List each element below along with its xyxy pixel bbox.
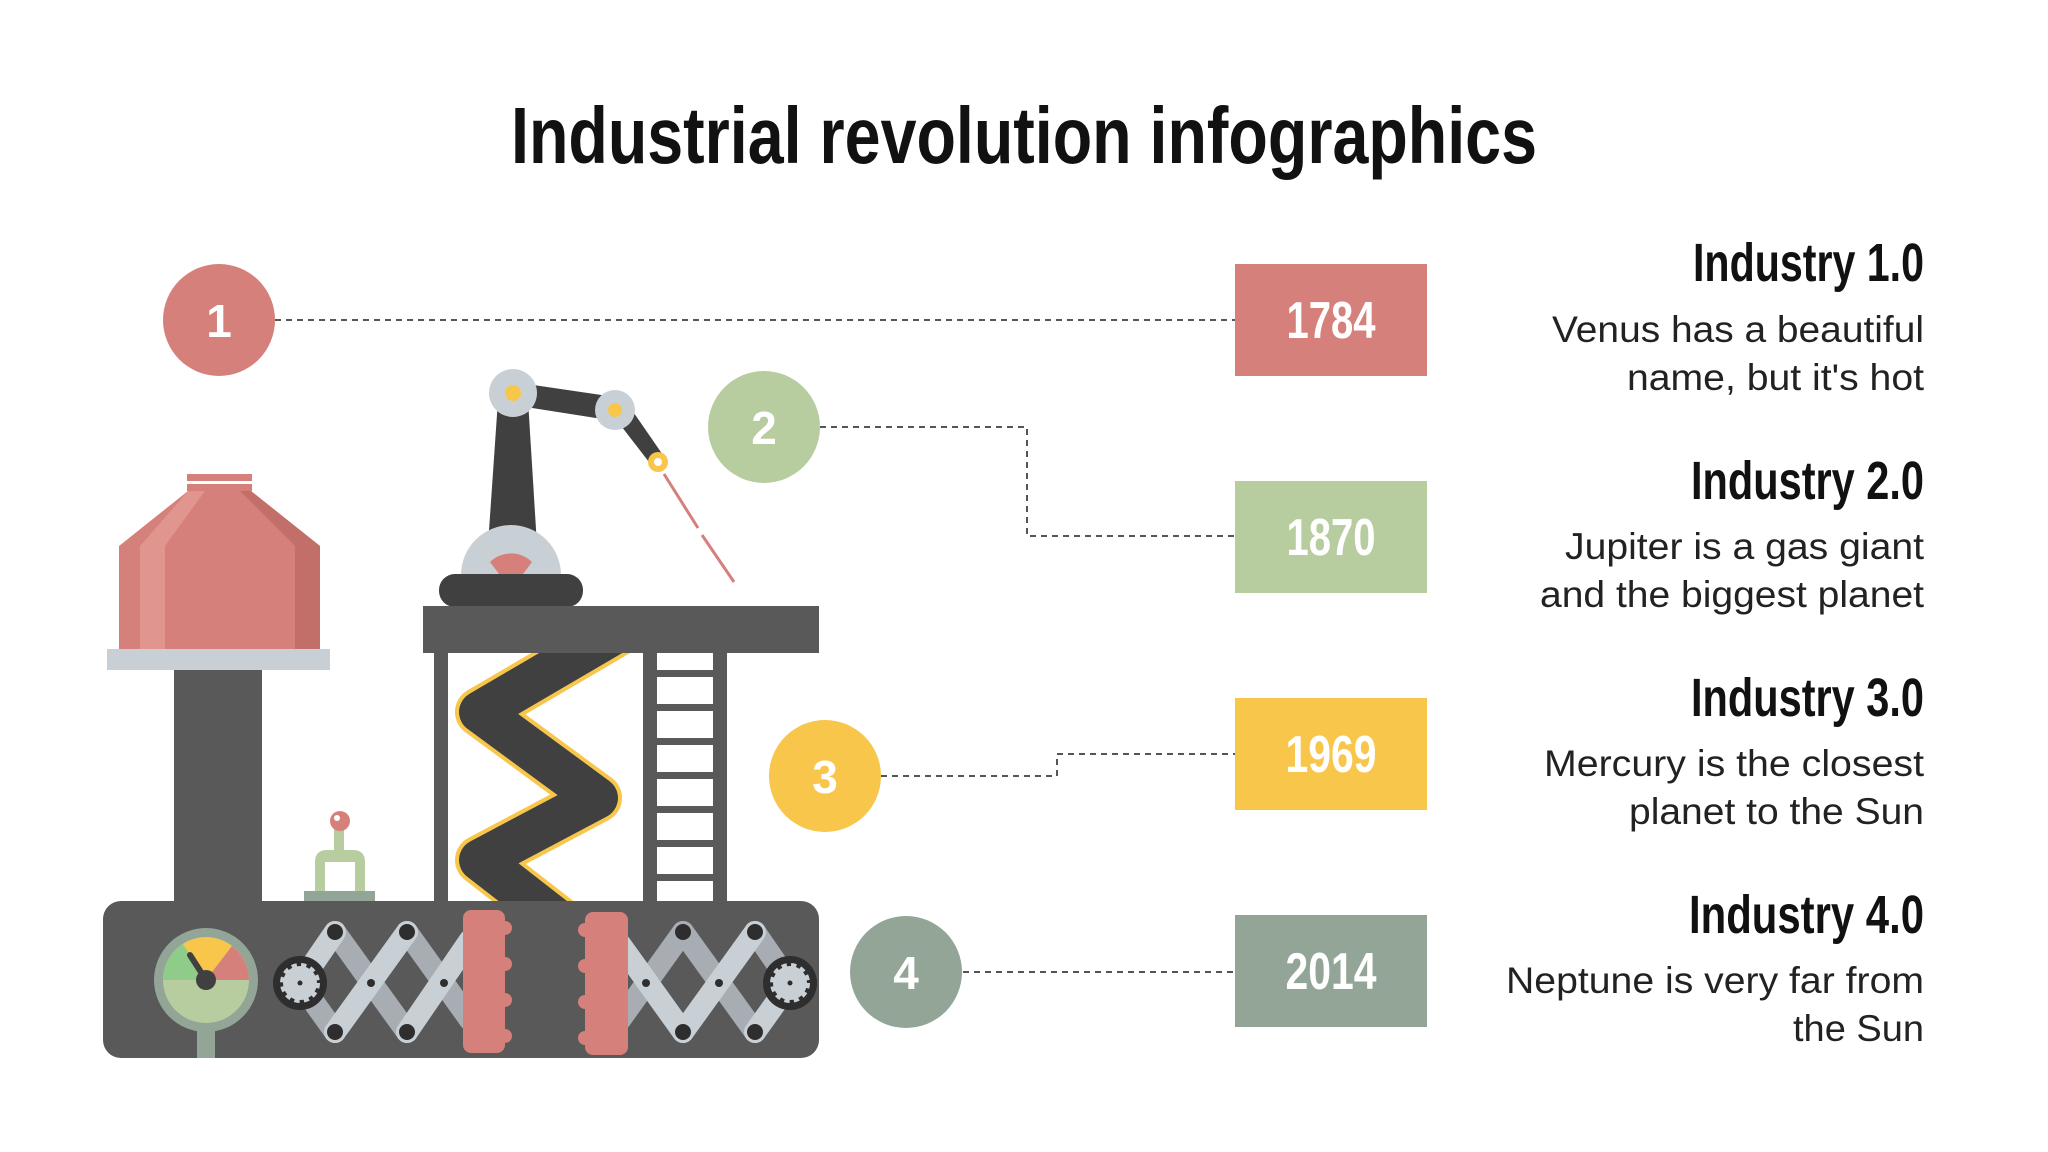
text block: Industry 3.0: Mercury is the closest bbox=[1544, 743, 1925, 784]
text block: Industry 4.0: the Sun bbox=[1793, 1008, 1924, 1049]
text block: Industry 1.0 bbox=[1552, 233, 1925, 398]
machine base bbox=[103, 901, 819, 1058]
year box 1784: 1784 bbox=[1286, 292, 1376, 350]
circle 4 bbox=[850, 916, 962, 1028]
year box 2014 bbox=[1235, 915, 1427, 1027]
text block: Industry 3.0: planet to the Sun bbox=[1629, 791, 1924, 832]
pressure gauge bbox=[154, 928, 258, 1058]
circle 2: 2 bbox=[751, 402, 777, 454]
circle 2 bbox=[708, 371, 820, 483]
text block: Industry 2.0: Industry 2.0 bbox=[1691, 451, 1924, 511]
year box 1870: 1870 bbox=[1286, 509, 1376, 567]
circle 3: 3 bbox=[812, 751, 838, 803]
scissor mechanisms bbox=[300, 924, 790, 1040]
circle 1 bbox=[163, 264, 275, 376]
year box 1784 bbox=[1235, 264, 1427, 376]
gears bbox=[273, 956, 817, 1010]
circle 4: 4 bbox=[893, 947, 919, 999]
text block: Industry 4.0: Neptune is very far from bbox=[1506, 960, 1924, 1001]
year box 1969: 1969 bbox=[1286, 726, 1376, 784]
text block: Industry 2.0: Jupiter is a gas giant bbox=[1565, 526, 1925, 567]
year box 1969 bbox=[1235, 698, 1427, 810]
title: Industrial revolution infographics bbox=[511, 91, 1537, 180]
text block: Industry 2.0 bbox=[1540, 451, 1925, 615]
table and ladder bbox=[423, 606, 819, 905]
circle 1: 1 bbox=[206, 295, 232, 347]
text block: Industry 1.0: name, but it's hot bbox=[1627, 357, 1925, 398]
red clamp blocks bbox=[463, 910, 628, 1055]
text block: Industry 4.0: Industry 4.0 bbox=[1689, 885, 1924, 945]
text block: Industry 4.0 bbox=[1506, 885, 1924, 1049]
water tank tower bbox=[107, 474, 330, 905]
circle 3 bbox=[769, 720, 881, 832]
year box 1870 bbox=[1235, 481, 1427, 593]
robot arm bbox=[439, 369, 734, 607]
zigzag conveyor bbox=[480, 630, 620, 930]
text block: Industry 2.0: and the biggest planet bbox=[1540, 574, 1925, 615]
connector lines bbox=[264, 320, 1235, 972]
text block: Industry 1.0: Venus has a beautiful bbox=[1552, 309, 1924, 350]
text block: Industry 3.0: Industry 3.0 bbox=[1691, 668, 1924, 728]
year box 2014: 2014 bbox=[1286, 943, 1377, 1001]
lever bbox=[304, 811, 375, 903]
machine illustration bbox=[103, 369, 819, 1058]
text block: Industry 3.0 bbox=[1544, 668, 1925, 832]
text block: Industry 1.0: Industry 1.0 bbox=[1693, 233, 1924, 293]
